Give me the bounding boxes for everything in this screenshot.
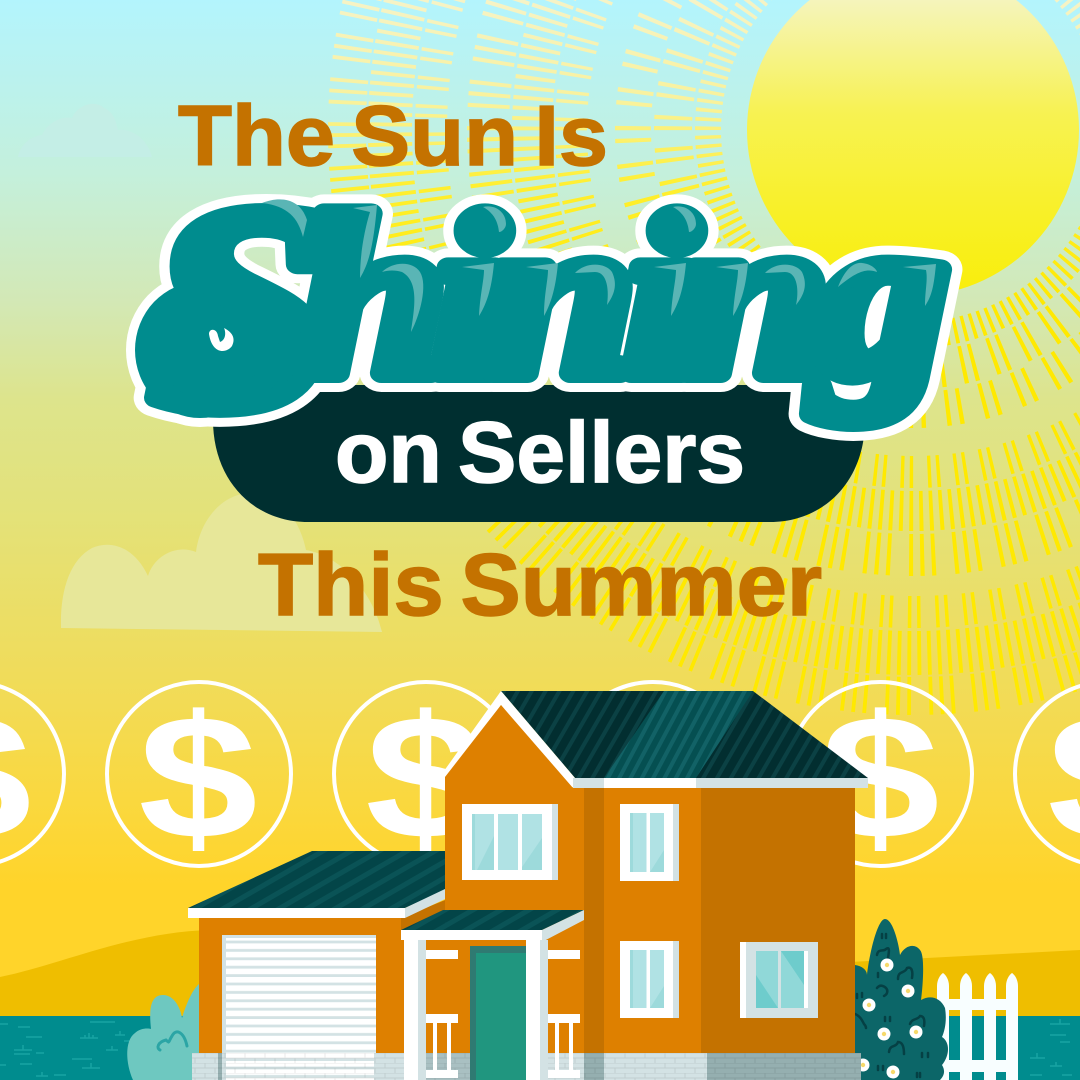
- dollar signs: $: [365, 678, 485, 876]
- garage wall: [199, 918, 445, 1053]
- garage eave: [188, 889, 445, 918]
- heading: Shining: hining: [299, 168, 948, 423]
- dollar signs: [0, 678, 1080, 876]
- dollar signs: $: [138, 678, 258, 876]
- porch roof: [401, 910, 584, 930]
- right bush with flowers: [855, 919, 948, 1080]
- upper left window: [462, 804, 558, 880]
- lawn tufts: [0, 1019, 1072, 1076]
- heading: Shining: [126, 147, 948, 468]
- garage side shade: [401, 900, 445, 935]
- cloud: upper left: [18, 104, 152, 157]
- sun rays: [347, 0, 1080, 696]
- porch left railing: [426, 950, 458, 1078]
- gabled wall: [445, 705, 584, 1053]
- house: [188, 691, 868, 1080]
- fence: [937, 973, 1018, 1080]
- front gable roof: [604, 691, 753, 778]
- front door: [470, 946, 526, 1080]
- garage roof: [188, 851, 445, 908]
- dark pill banner: [213, 385, 865, 522]
- upper gable frame: [434, 691, 575, 787]
- foundation: [192, 1053, 861, 1080]
- shadow wall: [584, 788, 604, 1053]
- banner text: on Sellers: on Sellers: [335, 405, 745, 501]
- lawn: [0, 1016, 1080, 1080]
- porch right post: [526, 940, 548, 1080]
- front wall: [604, 788, 701, 1053]
- heading: Shining: S: [149, 147, 335, 468]
- upper centre window: [620, 804, 679, 881]
- lower centre window: [620, 941, 679, 1018]
- dollar signs: $: [820, 678, 940, 876]
- heading highlights: [209, 199, 936, 351]
- eave band: [573, 778, 868, 788]
- porch left post: [404, 940, 426, 1080]
- garage door: [222, 935, 376, 1080]
- left bush: [127, 984, 199, 1080]
- cloud: lower left: [61, 493, 382, 632]
- sun: [747, 0, 1079, 296]
- dollar coins row: [0, 682, 1080, 866]
- heading: This Summer: This Summer: [258, 535, 822, 634]
- right wall: [701, 788, 855, 1053]
- heading: Shining: hining: [299, 168, 948, 423]
- heading: The Sun Is: The Sun Is: [178, 89, 608, 184]
- right wall window: [740, 942, 818, 1018]
- heading: Shining: S: [149, 147, 335, 468]
- hill: background: [0, 930, 1080, 1016]
- porch eave: [401, 910, 584, 942]
- main roof: [501, 691, 868, 778]
- porch right railing: [548, 950, 580, 1078]
